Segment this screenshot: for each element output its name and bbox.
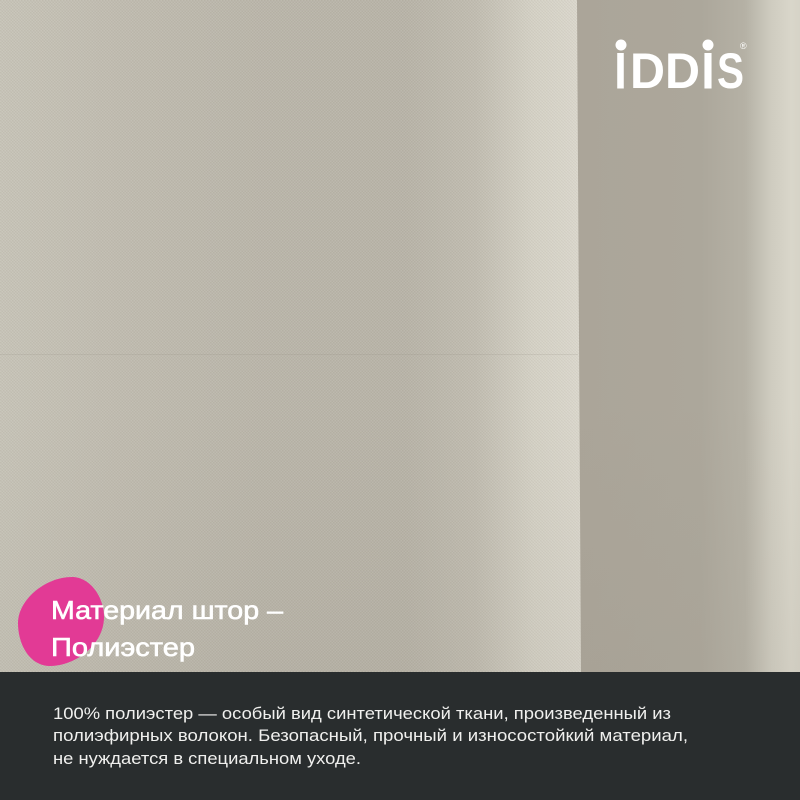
pink blob accent <box>18 577 104 666</box>
description panel <box>0 672 800 800</box>
title: Материал штор – <box>51 595 284 625</box>
description text <box>53 704 688 768</box>
logo: IDDIS: D <box>665 43 700 99</box>
logo: IDDIS: I <box>615 43 626 99</box>
logo: IDDIS: D <box>630 43 665 99</box>
title: Полиэстер <box>51 632 195 662</box>
description text: полиэфирных волокон. Безопасный, прочный и износостойкий материал, <box>53 726 688 745</box>
logo: IDDIS: I <box>702 43 714 99</box>
title <box>51 595 284 662</box>
description text: 100% полиэстер — особый вид синтетической ткани, произведенный из <box>53 704 671 723</box>
logo: IDDIS <box>615 40 747 99</box>
logo: IDDIS: S <box>717 43 744 99</box>
logo: IDDIS: ® <box>740 41 747 51</box>
description text: не нуждается в специальном уходе. <box>53 749 361 768</box>
